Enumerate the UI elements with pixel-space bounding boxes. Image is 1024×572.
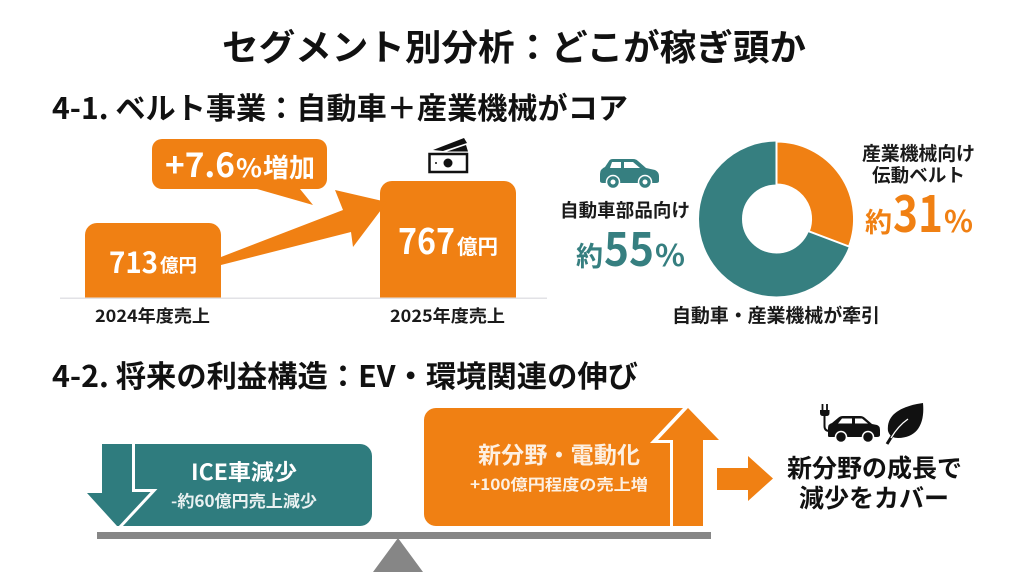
card: new fields and electrification: 新分野・電動化 bbox=[478, 436, 640, 470]
label: 2024: 2024年度売上 bbox=[95, 302, 210, 327]
panel: balance diagram bbox=[87, 403, 962, 572]
value: about 55%: 55 bbox=[604, 214, 654, 280]
value: about 31%: 約 bbox=[865, 201, 892, 240]
baseline bbox=[60, 298, 547, 299]
value: about 55% bbox=[576, 214, 685, 280]
card: ICE decline: ICE車減少 bbox=[191, 455, 297, 487]
heading: section 4-2: 4-2. 将来の利益構造：EV・環境関連の伸び bbox=[52, 352, 638, 396]
label: 2025: 2025年度売上 bbox=[390, 302, 505, 327]
label: industrial belts: 伝動ベルト bbox=[872, 162, 965, 188]
icon: leaf bbox=[887, 403, 923, 444]
callout: +7.6% increase: % bbox=[236, 149, 262, 185]
card: ICE decline: -約60億円売上減少 bbox=[171, 488, 318, 512]
conclusion text: 減少をカバー bbox=[799, 479, 949, 515]
callout: +7.6% increase bbox=[152, 139, 327, 205]
balance fulcrum bbox=[373, 538, 423, 572]
card: new fields and electrification bbox=[424, 408, 719, 526]
label: automotive parts: 自動車部品向け bbox=[560, 197, 690, 223]
conclusion text bbox=[787, 449, 962, 515]
panel: belt sales bar chart bbox=[60, 138, 547, 327]
value: about 31% bbox=[865, 175, 973, 247]
card: ICE decline bbox=[87, 443, 372, 527]
icon: EV car with plug bbox=[820, 404, 880, 442]
bar: 2024 sales bbox=[85, 223, 221, 298]
arrow: growth bbox=[221, 190, 387, 265]
callout: +7.6% increase: 増加 bbox=[263, 148, 315, 185]
arrow: to conclusion bbox=[717, 456, 773, 501]
value: about 55%: 約 bbox=[576, 235, 603, 274]
panel: belt usage donut chart bbox=[560, 139, 975, 328]
label: industrial belts: 産業機械向け bbox=[862, 139, 975, 166]
label: industrial belts bbox=[862, 139, 975, 188]
bar: 2024 sales: 億円 bbox=[160, 252, 197, 278]
card: new fields and electrification: +100億円程度の売上増 bbox=[470, 473, 648, 495]
icon: car bbox=[600, 159, 659, 188]
bar: 2025 sales: 767 bbox=[398, 214, 455, 265]
bar: 2025 sales: 億円 bbox=[457, 230, 498, 260]
donut chart bbox=[720, 141, 854, 275]
heading: section 4-1: 4-1. ベルト事業：自動車＋産業機械がコア bbox=[52, 84, 628, 128]
callout: +7.6% increase: +7.6 bbox=[165, 139, 235, 187]
donut caption: 自動車・産業機械が牽引 bbox=[672, 301, 880, 328]
value: about 31%: 31 bbox=[893, 175, 943, 247]
bar: 2024 sales: 713 bbox=[109, 240, 158, 282]
balance beam bbox=[97, 532, 711, 539]
value: about 31%: % bbox=[944, 197, 973, 241]
value: about 55%: % bbox=[655, 231, 685, 275]
bar: 2025 sales bbox=[380, 181, 516, 298]
icon: banknotes bbox=[430, 138, 468, 172]
conclusion text: 新分野の成長で bbox=[787, 449, 962, 485]
title: セグメント別分析：どこが稼ぎ頭か bbox=[222, 19, 806, 71]
